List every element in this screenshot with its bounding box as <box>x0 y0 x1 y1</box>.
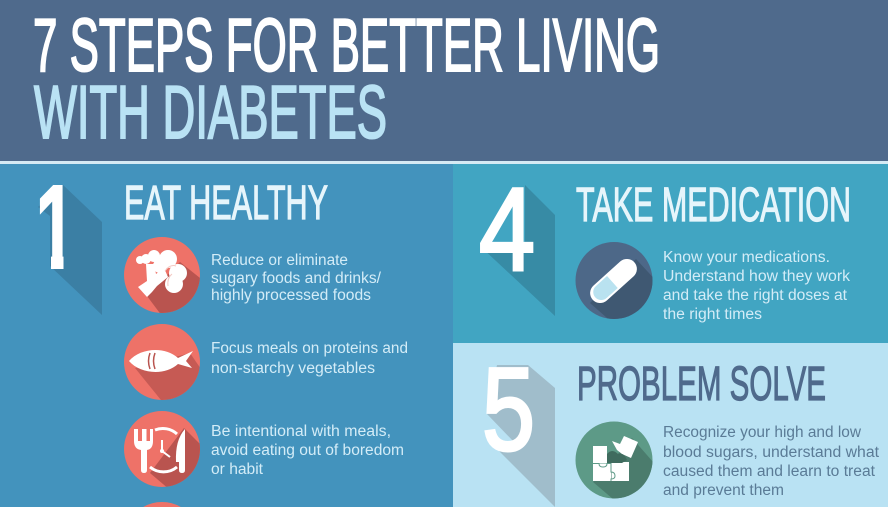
number 4 with long shadow: 4 <box>479 164 535 296</box>
text: be intentional <box>211 423 404 478</box>
text: know your medications <box>663 249 850 323</box>
icon: plate clock with cutlery <box>124 411 205 490</box>
panel: eat healthy <box>0 162 453 507</box>
text: be intentional: or habit <box>211 461 264 478</box>
title: WITH DIABETES <box>34 70 387 154</box>
number 5 with long shadow: 5 <box>482 344 535 476</box>
title <box>33 3 660 154</box>
text: recognize highs and lows: Recognize your high and low <box>663 424 862 441</box>
text: know your medications: the right times <box>663 306 762 323</box>
header band <box>0 0 888 164</box>
text: recognize highs and lows: blood sugars, understand what <box>663 444 880 461</box>
number 1 with long shadow: 1 <box>34 162 78 294</box>
text: be intentional: avoid eating out of boredom <box>211 442 404 459</box>
text: recognize highs and lows: and prevent them <box>663 482 784 499</box>
number 1 with long shadow <box>38 185 102 315</box>
text: focus meals: Focus meals on proteins and <box>211 340 408 357</box>
text: recognize highs and lows: caused them and learn to treat <box>663 463 876 480</box>
text: know your medications: Understand how they work <box>663 268 850 285</box>
text: be intentional: Be intentional with meals, <box>211 423 391 440</box>
icon: pill <box>576 242 652 319</box>
text: reduce sugary foods: Reduce or eliminate <box>211 252 348 269</box>
text: know your medications: Know your medications. <box>663 249 830 266</box>
panel: problem solve <box>453 343 888 507</box>
text: recognize highs and lows <box>663 424 880 499</box>
text: focus meals: non-starchy vegetables <box>211 360 375 377</box>
text: reduce sugary foods: sugary foods and drinks/ <box>211 270 382 287</box>
text: know your medications: and take the right doses at <box>663 287 848 304</box>
icon: next item circle <box>143 502 181 507</box>
icon: fish <box>124 324 200 400</box>
text: reduce sugary foods <box>211 252 382 304</box>
icon: puzzle <box>576 422 652 498</box>
text: reduce sugary foods: highly processed foods <box>211 287 371 304</box>
icon: broccoli <box>124 237 200 313</box>
panel: take medication <box>453 164 888 343</box>
heading: eat healthy: EAT HEALTHY <box>124 176 328 230</box>
text: focus meals <box>211 340 408 377</box>
